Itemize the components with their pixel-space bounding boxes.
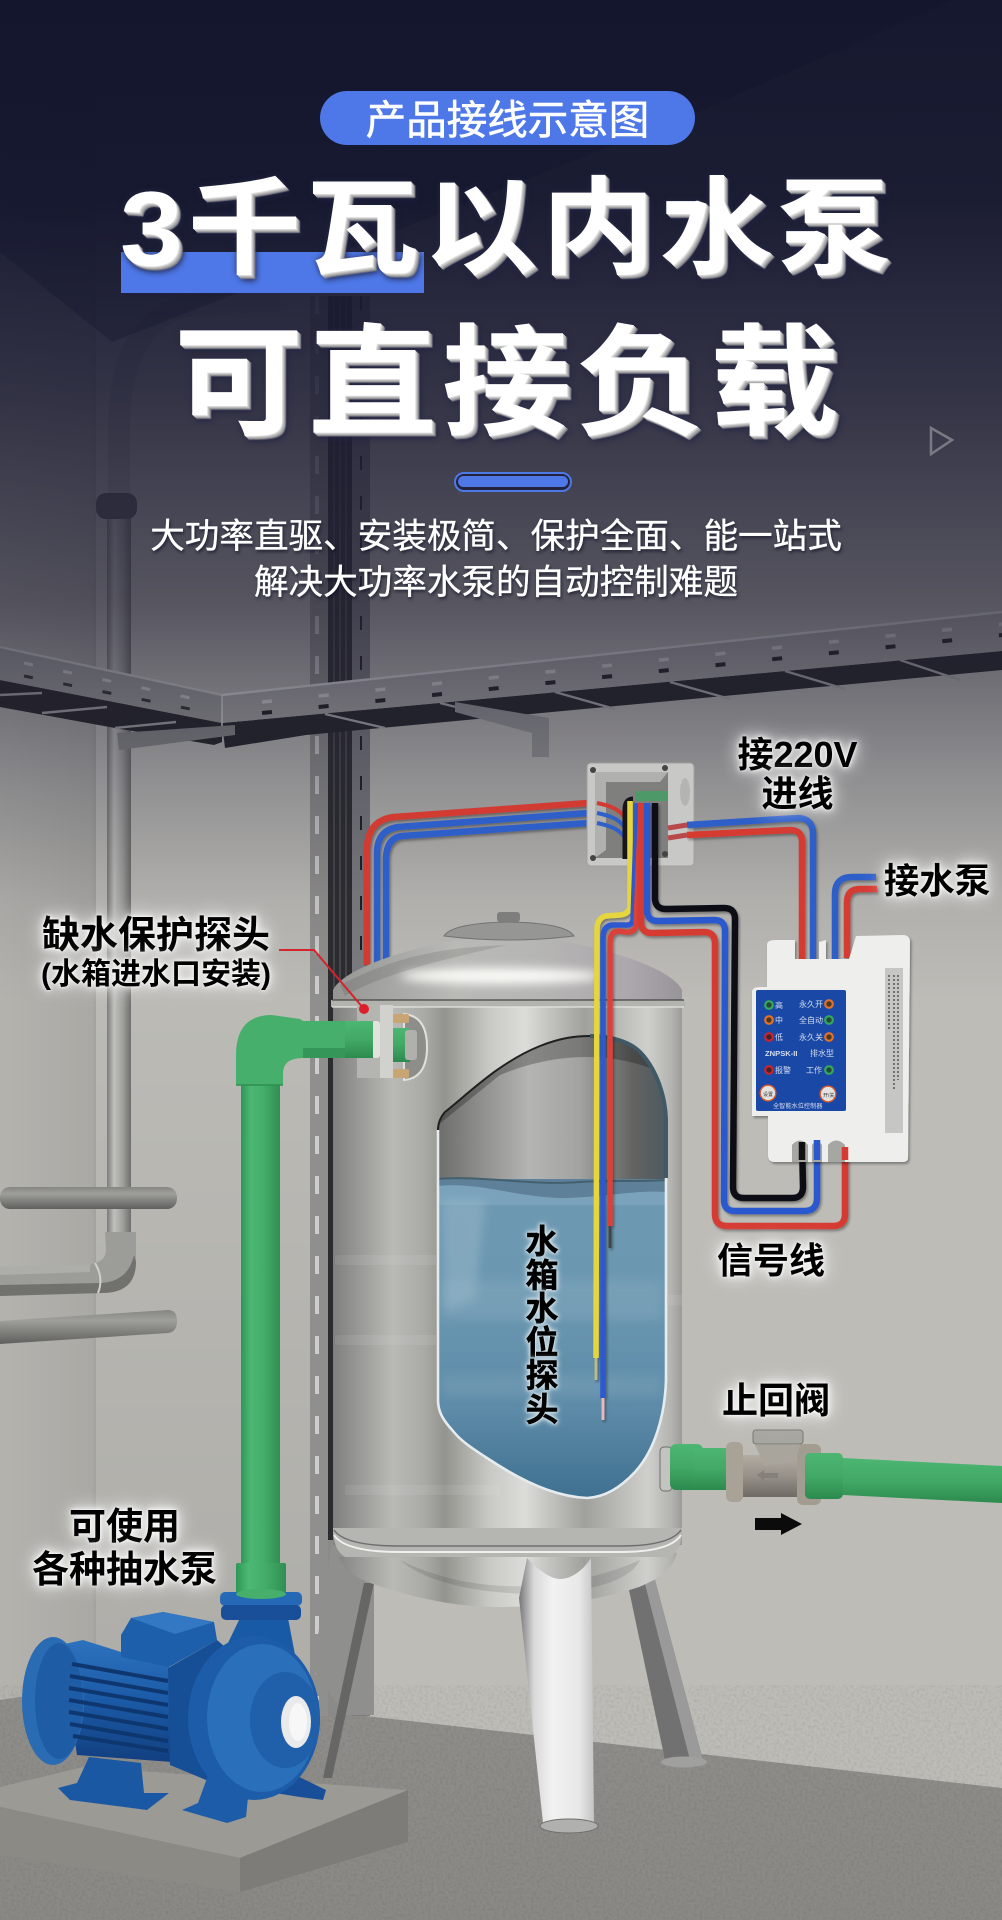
green inlet pipe with elbow — [236, 1015, 375, 1603]
panel text: 低 — [775, 1032, 783, 1042]
flange neck — [215, 1618, 296, 1670]
panel text: 全自动 — [799, 1015, 823, 1025]
lid — [444, 922, 574, 940]
junction box — [587, 763, 694, 866]
horizontal pipe upper — [0, 1187, 177, 1209]
label: 220V input: 接220V — [737, 734, 858, 775]
blue panel — [756, 990, 846, 1111]
tank cap — [333, 934, 682, 1000]
title highlight bar — [121, 252, 424, 293]
subtitle: 大功率直驱、安装极简、保护全面、能一站式 — [150, 518, 842, 556]
outlet pipe and check valve — [660, 1430, 1002, 1505]
tank legs — [313, 1540, 374, 1715]
panel buttons: 设置 — [763, 1091, 773, 1098]
cutaway window interior — [438, 1036, 666, 1500]
tank — [313, 912, 707, 1833]
left foot — [58, 1757, 169, 1810]
red pointer line — [279, 950, 369, 1014]
low-water probe bracket — [345, 1005, 427, 1080]
valve body — [743, 1455, 799, 1497]
header pill text: 产品接线示意图 — [366, 97, 649, 143]
panel buttons: 开/关 — [823, 1092, 834, 1099]
cable tray — [0, 612, 1002, 757]
right side panel — [222, 612, 1002, 723]
adapter — [168, 1640, 240, 1790]
panel text: 中 — [775, 1015, 783, 1025]
dark top overlay — [0, 0, 1002, 1000]
label: check valve: 止回阀 — [722, 1380, 830, 1421]
play triangle icon — [930, 426, 954, 456]
header pill — [320, 91, 695, 145]
tank body — [333, 1000, 682, 1545]
channel strut with cables — [310, 296, 370, 1716]
front foot — [182, 1767, 249, 1823]
title line 2: 可直接负载 — [174, 316, 844, 452]
input and pump wires — [687, 818, 877, 962]
front leg — [519, 1558, 594, 1823]
right bracket — [455, 702, 549, 757]
decorative pill — [454, 472, 572, 492]
label: tank level probe vertical: 水箱水位探头 — [526, 1223, 558, 1428]
elbow pipe — [0, 1232, 136, 1296]
panel buttons — [760, 1085, 836, 1102]
panel text: 高 — [775, 1000, 783, 1010]
panel text: ZNPSK-II — [765, 1049, 798, 1058]
right foot — [275, 1773, 326, 1800]
blue centrifugal pump — [22, 1589, 326, 1823]
title line 1: 3千瓦以内水泵 — [120, 170, 896, 288]
horizontal pipe lower — [0, 1310, 177, 1344]
inlet bore — [281, 1696, 311, 1748]
panel text: 报警 — [775, 1065, 791, 1075]
label: pump wire: 接水泵 — [884, 861, 990, 901]
tray mesh bottom — [0, 680, 222, 745]
tank bottom band and dome — [339, 1553, 677, 1607]
motor body with fins — [60, 1640, 172, 1762]
terminal box — [121, 1612, 217, 1667]
controller — [752, 935, 910, 1162]
left bracket — [117, 725, 235, 750]
panel text: 永久开 — [799, 999, 823, 1009]
label: pump types: 各种抽水泵 — [32, 1549, 217, 1590]
panel text: 排水型 — [810, 1048, 834, 1058]
signal wires — [641, 803, 845, 1226]
panel text: 永久关 — [799, 1032, 823, 1042]
label: pump types — [26, 1498, 223, 1596]
LEDs — [765, 1000, 833, 1074]
panel text: 全智能水位控制器 — [773, 1102, 823, 1110]
label: 220V input — [728, 726, 866, 823]
label: 220V input: 进线 — [761, 773, 834, 814]
label: pump types: 可使用 — [69, 1506, 180, 1547]
subtitle: 解决大功率水泵的自动控制难题 — [254, 564, 738, 602]
panel text: 工作 — [806, 1065, 822, 1075]
galvanized conduit with elbow — [0, 300, 280, 1344]
power wires to tank top — [367, 803, 588, 965]
dark ceiling plane — [0, 0, 952, 342]
volute — [188, 1636, 320, 1800]
left side panel — [0, 647, 222, 723]
probe wires — [596, 801, 641, 1420]
brushed streaks — [335, 1260, 682, 1490]
flow arrow — [755, 1513, 802, 1535]
water body — [438, 1195, 666, 1500]
label: probe install note: (水箱进水口安装) — [41, 958, 271, 991]
label: low-water probe: 缺水保护探头 — [42, 915, 270, 957]
concrete pad — [0, 1767, 408, 1892]
label: signal wire: 信号线 — [717, 1240, 825, 1281]
floor — [0, 1685, 1002, 1920]
subtitle — [150, 518, 843, 602]
panel text — [765, 999, 834, 1110]
